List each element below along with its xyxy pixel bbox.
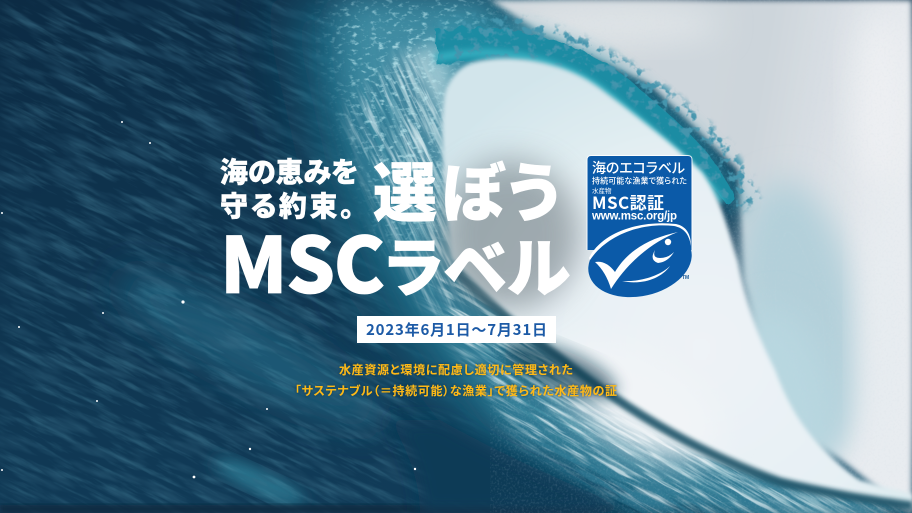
headline: MSC label: ラベル [385, 218, 570, 310]
headline: MSC label: MSC [220, 205, 385, 316]
logo: check mark fish [589, 223, 691, 289]
MSC ecolabel logo [581, 155, 699, 307]
text shadow: grey glow behind headline [440, 160, 580, 310]
foam: top right spray [490, 0, 912, 513]
logo: text: www.msc.org/jp [591, 210, 677, 222]
barrel: white inner wave [442, 58, 912, 506]
logo: text [591, 158, 687, 222]
logo: text: 海のエコラベル [592, 158, 685, 178]
wave lip: teal band [428, 12, 762, 218]
logo: blue badge [581, 155, 699, 307]
date badge: 2023年6月1日～7月31日 [366, 319, 547, 340]
headline: choose: 選ぼう [373, 143, 560, 235]
wave face: teal swath [290, 0, 912, 513]
wave texture: middle streaks [340, 52, 478, 316]
wave texture: upper flecks [314, 0, 497, 256]
caption: MSC explanation: 「サステナブル（＝持続可能）な漁業」で獲られた水産物の証 [295, 382, 617, 399]
logo: trademark: TM [682, 275, 689, 281]
headline: small tagline [220, 151, 358, 225]
caption: MSC explanation: 水産資源と環境に配慮し適切に管理された [339, 361, 573, 378]
specks: white droplets [1, 121, 416, 478]
lower lip: dark edge line [456, 272, 912, 506]
background: deep ocean [0, 0, 638, 513]
wave texture: lower streaks [417, 262, 910, 513]
logo: text: MSC認証 [592, 189, 664, 214]
logo: text: 持続可能な漁業で獲られた [592, 176, 687, 186]
caption: MSC explanation [295, 361, 617, 399]
headline: small tagline: 守る約束。 [220, 185, 354, 225]
headline: small tagline: 海の恵みを [220, 151, 358, 191]
text shadow: dark glow behind caption [497, 329, 623, 411]
logo: text: 水産物 [592, 185, 612, 195]
headline: MSC label [220, 205, 570, 316]
